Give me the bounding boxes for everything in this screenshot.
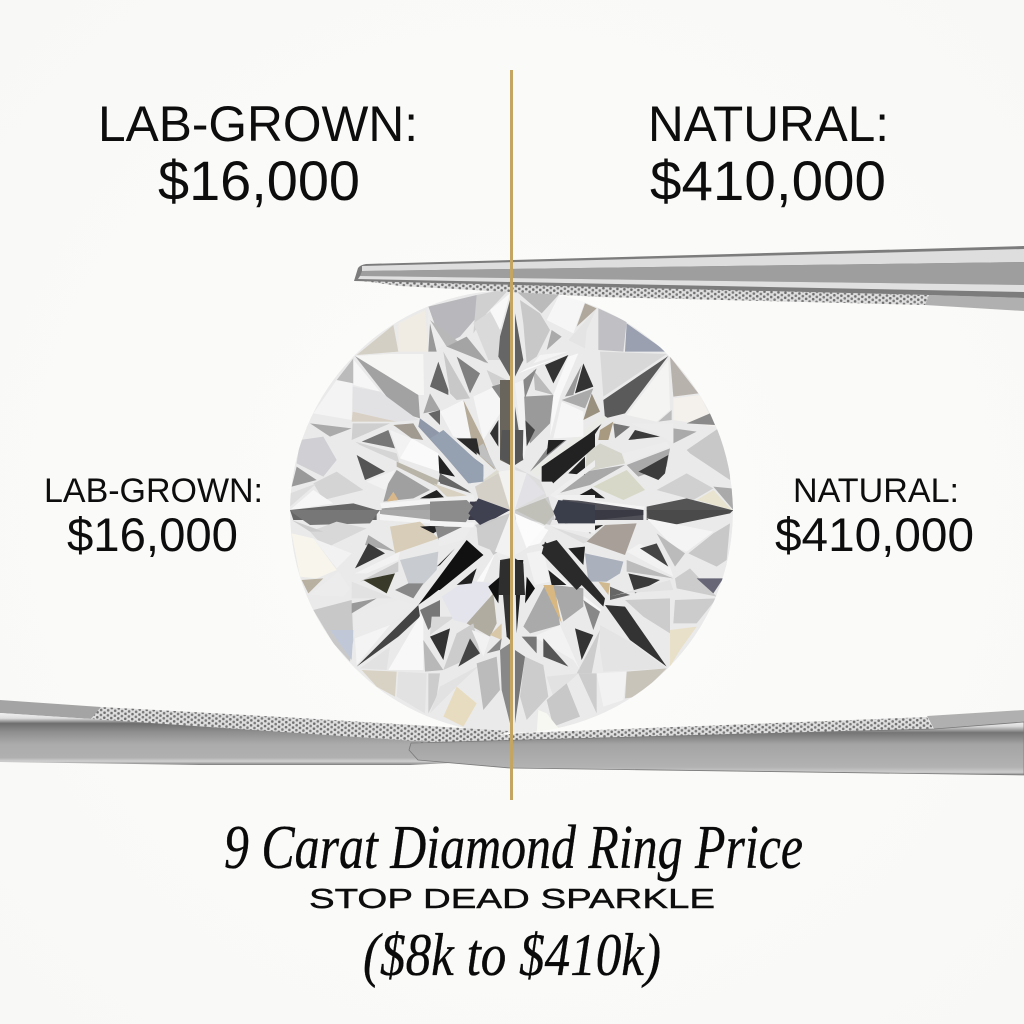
title: 9 Carat Diamond Ring Price <box>224 814 803 882</box>
heading: natural price <box>648 96 889 212</box>
side label: lab-grown: $16,000 <box>67 508 238 561</box>
divider line <box>510 70 513 800</box>
diamond facets: bottom left <box>290 510 510 727</box>
subtitle: STOP DEAD SPARKLE <box>309 883 715 914</box>
diamond facets: top left <box>290 288 510 520</box>
side label: natural: NATURAL: <box>793 472 959 510</box>
heading: natural price: $410,000 <box>650 149 886 212</box>
heading: lab-grown price: LAB-GROWN: <box>98 96 418 152</box>
diamond facets: centre star <box>430 430 595 595</box>
side label: natural: $410,000 <box>775 508 974 561</box>
side label: lab-grown <box>44 472 263 561</box>
side label: lab-grown: LAB-GROWN: <box>44 472 263 510</box>
side label: natural <box>775 472 974 561</box>
diamond <box>290 288 733 733</box>
bottom right tweezers <box>409 710 1024 775</box>
top tweezers <box>354 246 1024 311</box>
bottom left tweezers <box>0 700 510 765</box>
heading: lab-grown price <box>98 96 418 212</box>
diamond facets: bottom right <box>515 510 733 733</box>
heading: lab-grown price: $16,000 <box>158 149 360 212</box>
heading: natural price: NATURAL: <box>648 96 889 152</box>
price range: ($8k to $410k) <box>363 922 661 988</box>
diamond facets: top right <box>515 290 733 520</box>
